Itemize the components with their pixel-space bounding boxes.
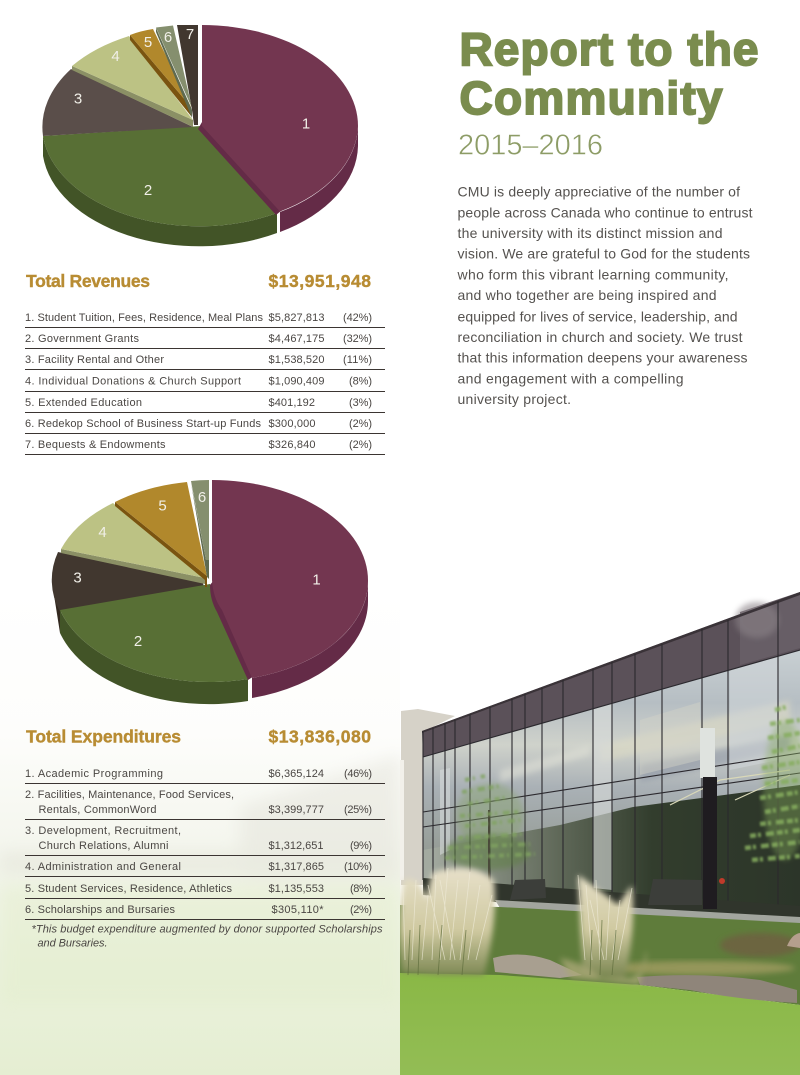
intro paragraph: equipped for lives of service, leadership, and: [458, 308, 738, 324]
row 6: [25, 904, 372, 916]
slice 1 Student Tuition: [198, 25, 358, 232]
row 6: $300,000: [268, 418, 316, 430]
row 5: [25, 397, 372, 409]
mid lawn: [400, 905, 800, 1005]
row 1: (46%): [344, 768, 372, 780]
slice 3 Development: [52, 552, 204, 633]
pie labels: 5: [144, 34, 152, 51]
row 7: 7. Bequests & Endowments: [25, 439, 166, 451]
row 7: [25, 439, 372, 451]
row 2: Rentals, CommonWord: [38, 804, 156, 816]
row 2: [25, 789, 372, 816]
row 4: (8%): [349, 376, 372, 388]
pie labels: 6: [164, 29, 172, 46]
title: [460, 23, 758, 124]
row 3: (9%): [350, 840, 372, 852]
row 1: (42%): [343, 312, 372, 324]
row 3: (11%): [343, 354, 372, 366]
pie labels: 4: [98, 524, 107, 541]
pie labels: 2: [144, 182, 152, 199]
row 3: $1,312,651: [268, 840, 324, 852]
row 2: [25, 333, 372, 345]
glass facade: [424, 650, 800, 850]
row 2: (25%): [344, 804, 372, 816]
ornamental grass tufts: [399, 868, 647, 985]
slice 6 Redekop School: [156, 26, 192, 118]
title: Community: [460, 72, 723, 124]
row 5: 5. Extended Education: [25, 397, 142, 409]
pie labels: 4: [111, 48, 120, 65]
slice 5 Student Services: [115, 482, 207, 587]
building base: [423, 878, 800, 920]
concrete tower: [401, 709, 455, 885]
slice 2 Government Grants: [43, 126, 277, 246]
row 4: 4. Individual Donations & Church Support: [25, 376, 241, 388]
footnote: *This budget expenditure augmented by donor supported Scholarships: [32, 924, 383, 936]
row 2: (32%): [343, 333, 372, 345]
intro paragraph: that this information deepens your awareness: [458, 350, 748, 366]
row 5: $1,135,553: [268, 883, 324, 895]
row 4: $1,090,409: [268, 376, 324, 388]
intro paragraph: people across Canada who continue to entrust: [458, 204, 753, 220]
pie labels: 6: [198, 489, 206, 506]
row 7: (2%): [349, 439, 372, 451]
row 4: 4. Administration and General: [25, 861, 181, 873]
rocks: [493, 933, 800, 1003]
pie chart: expenditures: [52, 480, 368, 704]
heading: total revenues: Total Revenues: [26, 271, 150, 291]
footnote: [32, 924, 383, 950]
row 3: $1,538,520: [268, 354, 324, 366]
table: revenues: [25, 312, 385, 454]
row 5: (3%): [349, 397, 372, 409]
heading: total expenditures: Total Expenditures: [26, 726, 181, 746]
slice 6 Scholarships: [191, 480, 209, 579]
pie labels: 2: [134, 633, 142, 650]
row 2: 2. Government Grants: [25, 333, 140, 345]
row 1: [25, 312, 372, 324]
bright lawn: [400, 973, 800, 1075]
row 4: (10%): [344, 861, 372, 873]
upper panel band: [422, 592, 800, 757]
slice 7 Bequests: [177, 25, 198, 125]
heading: total revenues: [26, 271, 371, 291]
pie labels: 7: [186, 26, 194, 43]
heading: total expenditures: $13,836,080: [268, 726, 371, 746]
sky reflection bands: [500, 700, 790, 782]
pie labels: 5: [158, 498, 167, 514]
row 6: 6. Scholarships and Bursaries: [25, 904, 176, 916]
sapling right: [745, 706, 800, 860]
pie labels: 1: [302, 116, 310, 132]
heading: total expenditures: [26, 726, 371, 746]
row 5: 5. Student Services, Residence, Athletics: [25, 883, 232, 895]
pie labels: 3: [73, 570, 82, 586]
footnote: and Bursaries.: [38, 938, 108, 950]
row 6: 6. Redekop School of Business Start-up Funds: [25, 418, 262, 430]
intro paragraph: CMU is deeply appreciative of the number of: [458, 184, 740, 200]
intro paragraph: [456, 184, 753, 407]
row 4: $1,317,865: [268, 861, 324, 873]
pie labels: 1: [312, 572, 321, 588]
row 1: 1. Academic Programming: [25, 768, 163, 780]
row 1: $5,827,813: [268, 312, 324, 324]
row 7: $326,840: [268, 439, 316, 451]
intro paragraph: vision. We are grateful to God for the students: [458, 246, 750, 262]
row 3: 3. Development, Recruitment,: [25, 825, 181, 837]
row 3: Church Relations, Alumni: [38, 840, 168, 852]
sidewalk: [495, 900, 800, 924]
row 3: [25, 825, 372, 852]
row 6: (2%): [350, 904, 372, 916]
intro paragraph: who form this vibrant learning community,: [456, 266, 728, 282]
pie chart: revenues: [42, 25, 358, 246]
table: expenditures: [25, 768, 385, 920]
row 6: [25, 418, 372, 430]
reflection lights: [670, 770, 790, 805]
row 1: $6,365,124: [268, 768, 324, 780]
row 5: (8%): [350, 883, 372, 895]
slice 1 Academic Programming: [210, 480, 368, 698]
slice 4 Administration: [61, 503, 205, 584]
subtitle: year: 2015–2016: [458, 130, 603, 162]
intro paragraph: the university with its distinct mission and: [458, 225, 722, 241]
row 3: 3. Facility Rental and Other: [25, 354, 164, 366]
window mullions: [423, 601, 800, 906]
benches: [510, 879, 702, 905]
row 4: [25, 376, 372, 388]
intro paragraph: university project.: [458, 391, 571, 407]
faded background photo: [0, 590, 400, 1075]
heading: total revenues: $13,951,948: [268, 271, 371, 291]
row 1: [25, 768, 372, 780]
intro paragraph: and engagement with a compelling: [458, 370, 684, 386]
row 2: $3,399,777: [268, 804, 324, 816]
row 5: [25, 883, 372, 895]
intro paragraph: and who together are being inspired and: [458, 287, 716, 303]
row 4: [25, 861, 372, 873]
pie labels: [74, 26, 310, 199]
intro paragraph: reconciliation in church and society. We trust: [458, 329, 743, 345]
row 6: (2%): [349, 418, 372, 430]
slice 2 Facilities: [60, 584, 248, 704]
pie labels: 3: [74, 90, 82, 108]
sapling left: [445, 776, 535, 882]
slice 5 Extended Education: [130, 29, 191, 116]
row 6: $305,110*: [272, 904, 324, 916]
row 3: [25, 354, 372, 366]
slice 4 Individual Donations: [72, 36, 193, 127]
slice 3 Facility Rental: [42, 69, 193, 136]
lamp post: [700, 728, 717, 909]
pie labels: [73, 489, 321, 650]
row 5: $401,192: [268, 397, 315, 409]
row 2: $4,467,175: [268, 333, 324, 345]
title: Report to the: [460, 23, 758, 75]
row 1: 1. Student Tuition, Fees, Residence, Meal Plans: [25, 312, 264, 324]
row 2: 2. Facilities, Maintenance, Food Services,: [25, 789, 234, 801]
photo: campus building and lawn: [399, 592, 800, 1075]
